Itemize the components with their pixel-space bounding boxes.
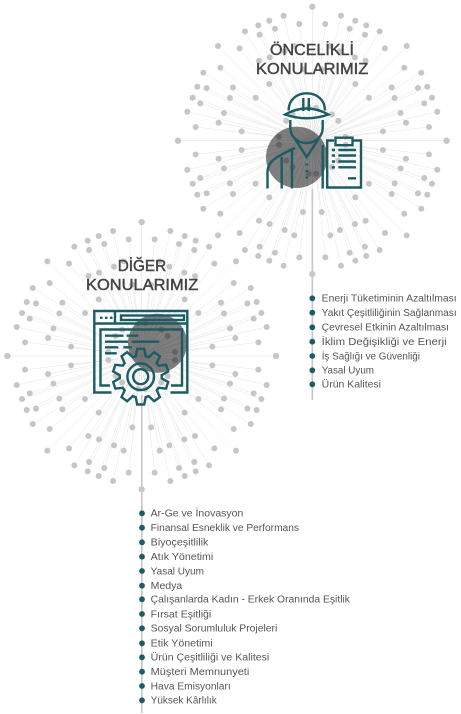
starburst: top [175, 4, 450, 277]
list: diğer konular: Yasal Uyum [151, 566, 204, 577]
icon: browser window with gear [94, 311, 187, 405]
list: diğer konular: Hava Emisyonları [151, 681, 231, 692]
heading: diğer konularımız: DİĞER [118, 257, 166, 275]
heading: öncelikli konularımız: KONULARIMIZ [256, 61, 368, 78]
list: diğer konular: Finansal Esneklik ve Performans [151, 523, 299, 534]
grey circle: top [266, 127, 327, 188]
list: diğer konular: Yüksek Kârlılık [151, 696, 218, 707]
heading: diğer konularımız: KONULARIMIZ [86, 277, 198, 294]
gear [112, 349, 169, 404]
stem line: bottom [141, 395, 143, 713]
list: diğer konular: Medya [151, 581, 183, 592]
list: diğer konular: Sosyal Sorumluluk Projeleri [151, 624, 277, 635]
starburst: bottom [4, 219, 279, 492]
list: öncelikli konular: Çevresel Etkinin Azaltılması [322, 323, 449, 334]
list: diğer konular [139, 507, 351, 707]
list: diğer konular: Biyoçeşitlilik [151, 538, 209, 549]
stem line: top [312, 189, 313, 400]
list: diğer konular: Atık Yönetimi [151, 552, 213, 563]
list: diğer konular: Çalışanlarda Kadın - Erkek Oranında Eşitlik [151, 595, 351, 606]
list: diğer konular: Ürün Çeşitliliği ve Kalitesi [151, 652, 269, 664]
list: öncelikli konular: İklim Değişikliği ve Enerji [322, 335, 447, 348]
heading: öncelikli konularımız [256, 41, 368, 78]
list: öncelikli konular: Ürün Kalitesi [322, 379, 381, 391]
list: diğer konular: Ar-Ge ve İnovasyon [151, 507, 243, 520]
heading: diğer konularımız [86, 257, 198, 294]
list: diğer konular: Fırsat Eşitliği [151, 609, 211, 620]
grey circle: bottom [128, 314, 187, 373]
list: öncelikli konular [309, 294, 457, 391]
list: diğer konular: Etik Yönetimi [151, 639, 213, 650]
heading: öncelikli konularımız: ÖNCELİKLİ [270, 41, 354, 59]
list: diğer konular: Müşteri Memnunyeti [151, 667, 249, 678]
list: öncelikli konular: Yasal Uyum [322, 366, 374, 377]
list: öncelikli konular: İş Sağlığı ve Güvenliği [322, 349, 420, 362]
list: öncelikli konular: Enerji Tüketiminin Azaltılması [322, 294, 457, 305]
icon: worker with clipboard [268, 93, 361, 188]
list: öncelikli konular: Yakıt Çeşitliliğinin Sağlanması [322, 308, 457, 319]
